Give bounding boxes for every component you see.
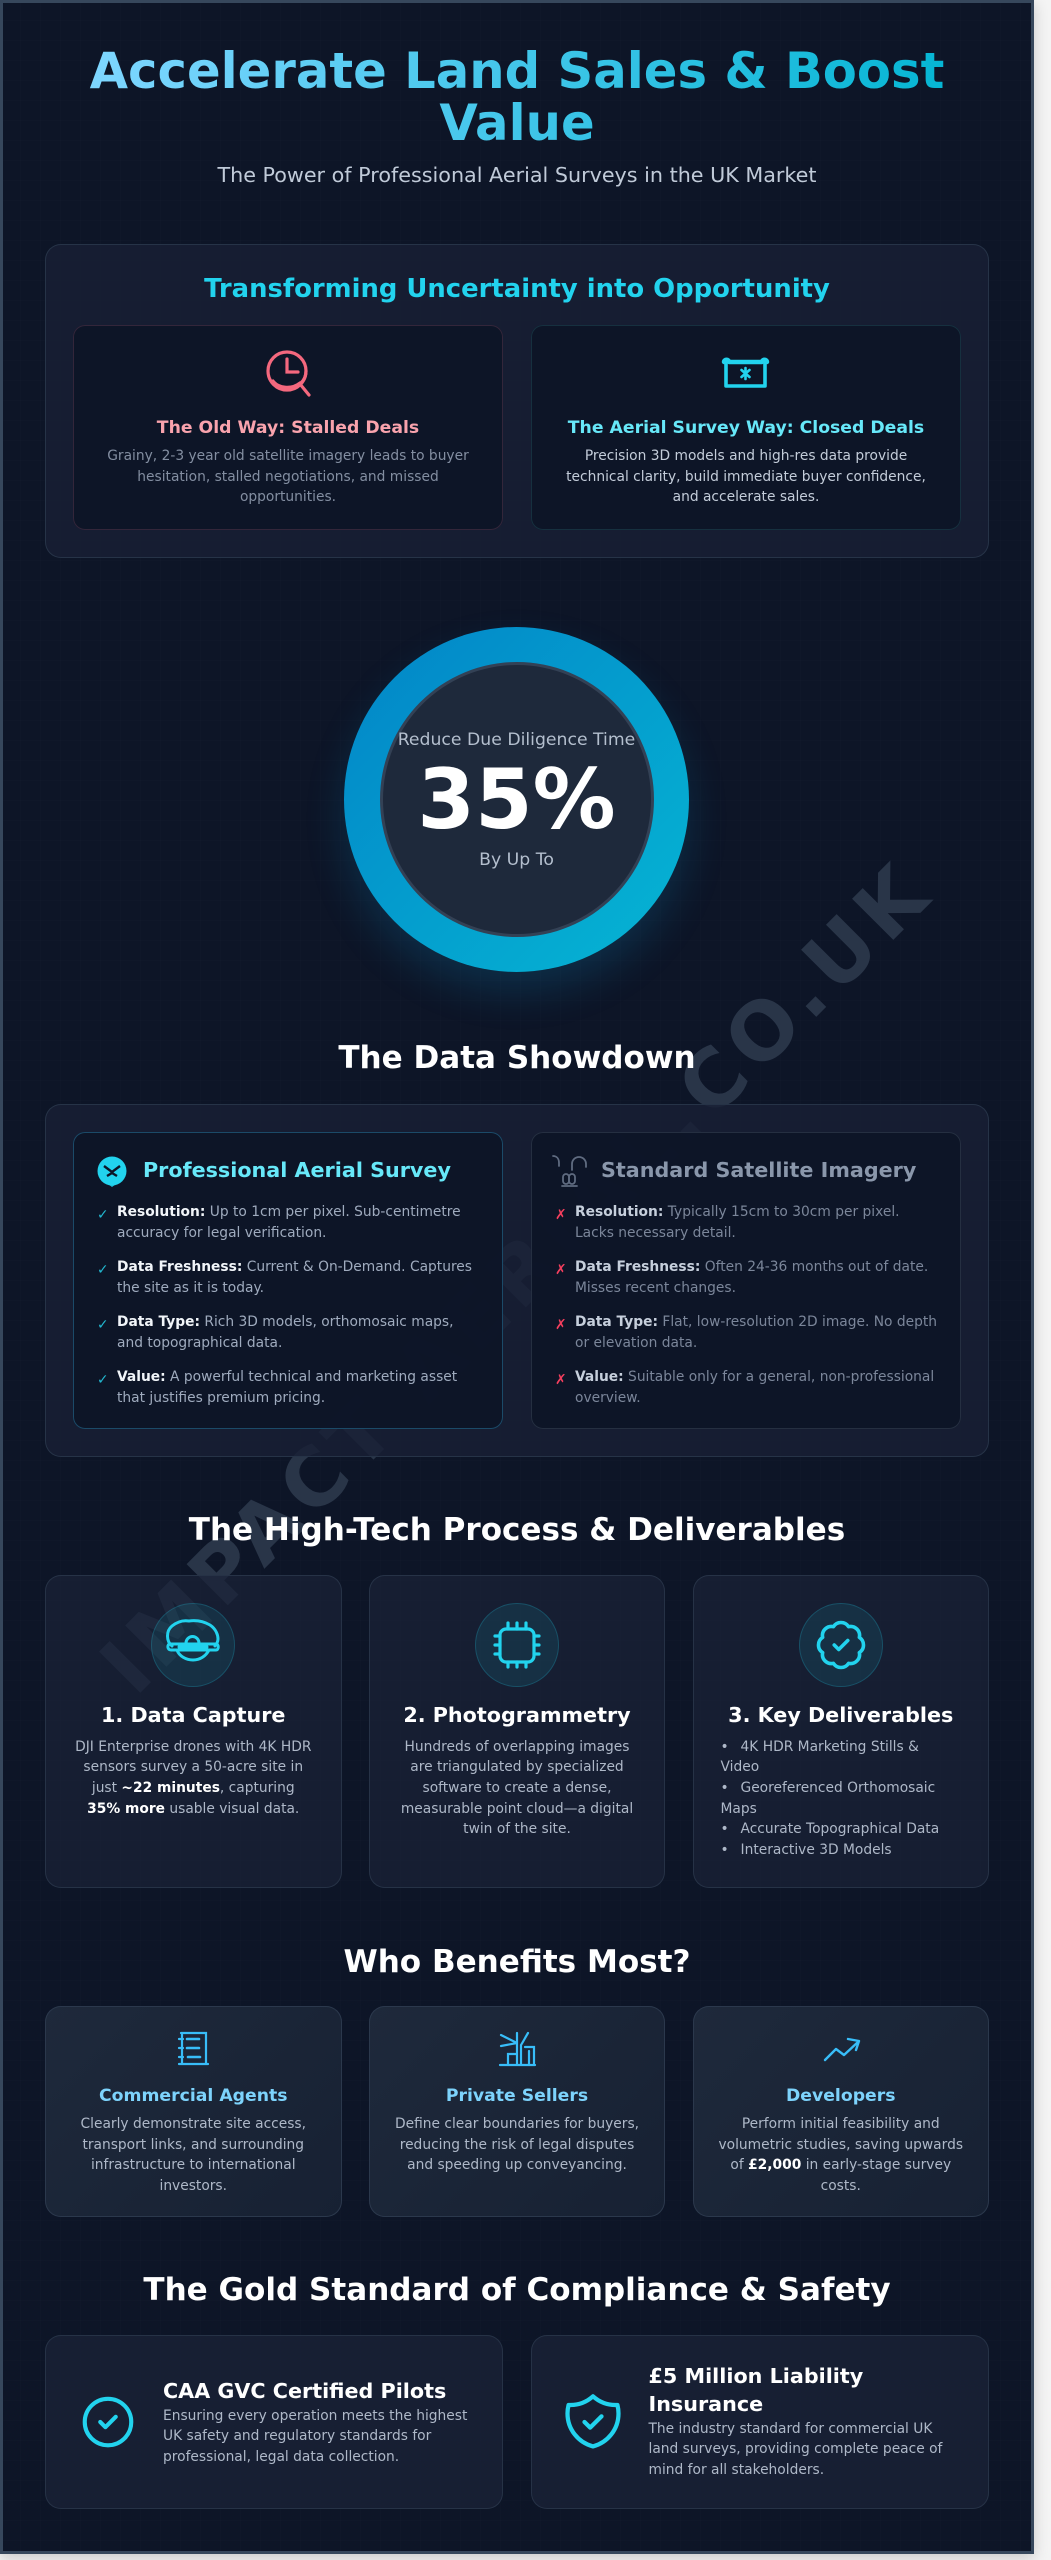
card text xyxy=(107,448,469,505)
card text xyxy=(566,448,926,505)
card: photogrammetry xyxy=(369,1575,665,1888)
heading: data showdown: The Data Showdown xyxy=(338,1040,696,1076)
card text: Ensuring every operation meets the highest xyxy=(163,2408,467,2424)
comparison list: the site as it is today. xyxy=(117,1280,264,1296)
card text: software to create a dense, xyxy=(423,1780,611,1796)
deliverables list: Georeferenced Orthomosaic xyxy=(740,1780,935,1796)
comparison list: that justifies premium pricing. xyxy=(117,1390,325,1406)
inner disc xyxy=(380,662,654,937)
card text: and accelerate sales. xyxy=(673,489,819,505)
card text: Hundreds of overlapping images xyxy=(405,1738,629,1754)
card title: CAA GVC Certified Pilots xyxy=(163,2379,446,2403)
deliverables list: Video xyxy=(720,1759,759,1775)
column: standard satellite imagery: ✗ xyxy=(555,1317,567,1333)
heading: compliance: The Gold Standard of Compliance & Safety xyxy=(143,2272,891,2308)
card text: costs. xyxy=(821,2178,861,2194)
icon: shield check xyxy=(565,2394,621,2448)
subtitle: The Power of Professional Aerial Surveys in the UK Market xyxy=(217,163,817,187)
column: standard satellite imagery: ✗ xyxy=(555,1372,567,1388)
card: aerial survey way xyxy=(531,325,961,530)
icon: wind and buildings xyxy=(498,2032,536,2066)
icon: document xyxy=(178,2032,210,2066)
card text: and speeding up conveyancing. xyxy=(407,2157,627,2173)
card text: hesitation, stalled negotiations, and missed xyxy=(137,469,439,485)
heading: process: The High-Tech Process & Deliverables xyxy=(189,1512,845,1548)
stat label bottom: By Up To xyxy=(479,850,554,870)
card: developers xyxy=(692,2006,989,2217)
card text: 35% more usable visual data. xyxy=(87,1801,299,1817)
heading: who benefits: Who Benefits Most? xyxy=(343,1944,691,1980)
card text: just ~22 minutes, capturing xyxy=(92,1780,295,1796)
comparison list: Data Type: Flat, low-resolution 2D image. No depth xyxy=(575,1314,937,1330)
card text: land surveys, providing complete peace of xyxy=(648,2441,942,2457)
comparison list: overview. xyxy=(575,1390,641,1406)
deliverables list: • xyxy=(720,1780,729,1796)
card title: 2. Photogrammetry xyxy=(403,1703,631,1727)
card title: 3. Key Deliverables xyxy=(728,1703,953,1727)
card title: Insurance xyxy=(648,2392,763,2416)
card text xyxy=(648,2420,943,2478)
stat label top: Reduce Due Diligence Time xyxy=(398,730,635,750)
stat circle: 35% xyxy=(344,627,689,972)
card text: opportunities. xyxy=(240,489,336,505)
deliverables list: • xyxy=(720,1821,729,1837)
column: professional aerial survey: ✓ xyxy=(97,1372,109,1388)
card title: The Old Way: Stalled Deals xyxy=(157,418,419,438)
card text: UK safety and regulatory standards for xyxy=(163,2428,431,2444)
deliverables list xyxy=(720,1738,939,1858)
icon: clock search xyxy=(266,350,311,397)
column: standard satellite imagery: ✗ xyxy=(555,1262,567,1278)
title xyxy=(0,45,1034,149)
comparison list: Resolution: Typically 15cm to 30cm per pixel. xyxy=(575,1204,900,1220)
deliverables list: Interactive 3D Models xyxy=(740,1842,892,1858)
card text: are triangulated by specialized xyxy=(410,1759,624,1775)
comparison list: accuracy for legal verification. xyxy=(117,1225,326,1241)
icon: drone xyxy=(151,1603,235,1687)
panel: data showdown xyxy=(45,1104,989,1457)
card text: Define clear boundaries for buyers, xyxy=(395,2116,639,2132)
card text: sensors survey a 50-acre site in xyxy=(83,1759,303,1775)
card text: infrastructure to international xyxy=(91,2157,296,2173)
card title: Private Sellers xyxy=(446,2086,588,2106)
card text: Precision 3D models and high-res data provide xyxy=(585,448,907,464)
column: professional aerial survey xyxy=(73,1132,503,1429)
card text xyxy=(75,1738,311,1817)
card text: DJI Enterprise drones with 4K HDR xyxy=(75,1738,311,1754)
comparison list: Value: Suitable only for a general, non-professional xyxy=(575,1369,934,1385)
card text: twin of the site. xyxy=(463,1821,571,1837)
card text xyxy=(395,2116,639,2173)
card text: reducing the risk of legal disputes xyxy=(400,2137,634,2153)
column title: Standard Satellite Imagery xyxy=(601,1158,916,1182)
comparison list: Data Freshness: Current & On-Demand. Captures xyxy=(117,1259,472,1275)
watermark: IMPACT AERIAL.CO.UK xyxy=(83,844,950,1711)
column title: Professional Aerial Survey xyxy=(143,1158,451,1182)
icon: drone badge xyxy=(98,1156,126,1187)
card text: Clearly demonstrate site access, xyxy=(80,2116,306,2132)
card title xyxy=(648,2364,863,2416)
card text: measurable point cloud—a digital xyxy=(401,1801,633,1817)
card text: The industry standard for commercial UK xyxy=(648,2420,932,2436)
comparison list: or elevation data. xyxy=(575,1335,697,1351)
card title: 1. Data Capture xyxy=(101,1703,285,1727)
column: professional aerial survey: ✓ xyxy=(97,1317,109,1333)
icon: chip xyxy=(475,1603,559,1687)
deliverables list: 4K HDR Marketing Stills & xyxy=(740,1738,919,1754)
card text: mind for all stakeholders. xyxy=(648,2462,824,2478)
card text: Perform initial feasibility and xyxy=(742,2116,940,2132)
card text xyxy=(718,2116,963,2194)
deliverables list: • xyxy=(720,1842,729,1858)
icon: verified badge xyxy=(798,1603,882,1687)
comparison list: Resolution: Up to 1cm per pixel. Sub-centimetre xyxy=(117,1204,461,1220)
card title: £5 Million Liability xyxy=(648,2364,863,2388)
card: private sellers xyxy=(369,2006,665,2217)
card text: volumetric studies, saving upwards xyxy=(718,2137,963,2153)
card: liability insurance xyxy=(531,2335,989,2509)
panel: transforming uncertainty xyxy=(45,244,989,558)
comparison list: and topographical data. xyxy=(117,1335,282,1351)
card text xyxy=(80,2116,306,2194)
panel heading: Transforming Uncertainty into Opportunity xyxy=(204,274,830,304)
card text: technical clarity, build immediate buyer confidence, xyxy=(566,469,926,485)
column: standard satellite imagery: ✗ xyxy=(555,1207,567,1223)
column: standard satellite imagery xyxy=(531,1132,961,1429)
title: Accelerate Land Sales & Boost xyxy=(90,42,944,100)
card text: Grainy, 2-3 year old satellite imagery leads to buyer xyxy=(107,448,469,464)
comparison list: Data Type: Rich 3D models, orthomosaic maps, xyxy=(117,1314,454,1330)
card: data capture xyxy=(45,1575,342,1888)
icon: trending arrow xyxy=(824,2038,860,2062)
column: professional aerial survey: ✓ xyxy=(97,1207,109,1223)
icon: check circle xyxy=(82,2396,134,2448)
card text xyxy=(401,1738,633,1837)
column: professional aerial survey: ✓ xyxy=(97,1262,109,1278)
card title: Commercial Agents xyxy=(99,2086,288,2106)
deliverables list: • xyxy=(720,1738,729,1754)
card text: of £2,000 in early-stage survey xyxy=(730,2157,951,2173)
stat value: 35% xyxy=(417,751,616,848)
card: old way xyxy=(73,325,503,530)
comparison list: Misses recent changes. xyxy=(575,1280,736,1296)
card: CAA pilots xyxy=(45,2335,503,2509)
deliverables list: Maps xyxy=(720,1801,757,1817)
deliverables list: Accurate Topographical Data xyxy=(740,1821,939,1837)
card: commercial agents xyxy=(45,2006,342,2217)
comparison list xyxy=(555,1204,937,1406)
card title: Developers xyxy=(786,2086,896,2106)
title: Value xyxy=(439,94,595,152)
comparison list xyxy=(97,1204,472,1406)
card text: investors. xyxy=(159,2178,227,2194)
card text: transport links, and surrounding xyxy=(82,2137,304,2153)
comparison list: Data Freshness: Often 24-36 months out of date. xyxy=(575,1259,928,1275)
card text xyxy=(163,2408,468,2465)
icon: scroll xyxy=(722,358,770,388)
icon: satellite xyxy=(552,1155,587,1187)
card title: The Aerial Survey Way: Closed Deals xyxy=(568,418,924,438)
card text: professional, legal data collection. xyxy=(163,2449,399,2465)
comparison list: Value: A powerful technical and marketing asset xyxy=(117,1369,457,1385)
card: key deliverables xyxy=(692,1575,989,1888)
comparison list: Lacks necessary detail. xyxy=(575,1225,736,1241)
